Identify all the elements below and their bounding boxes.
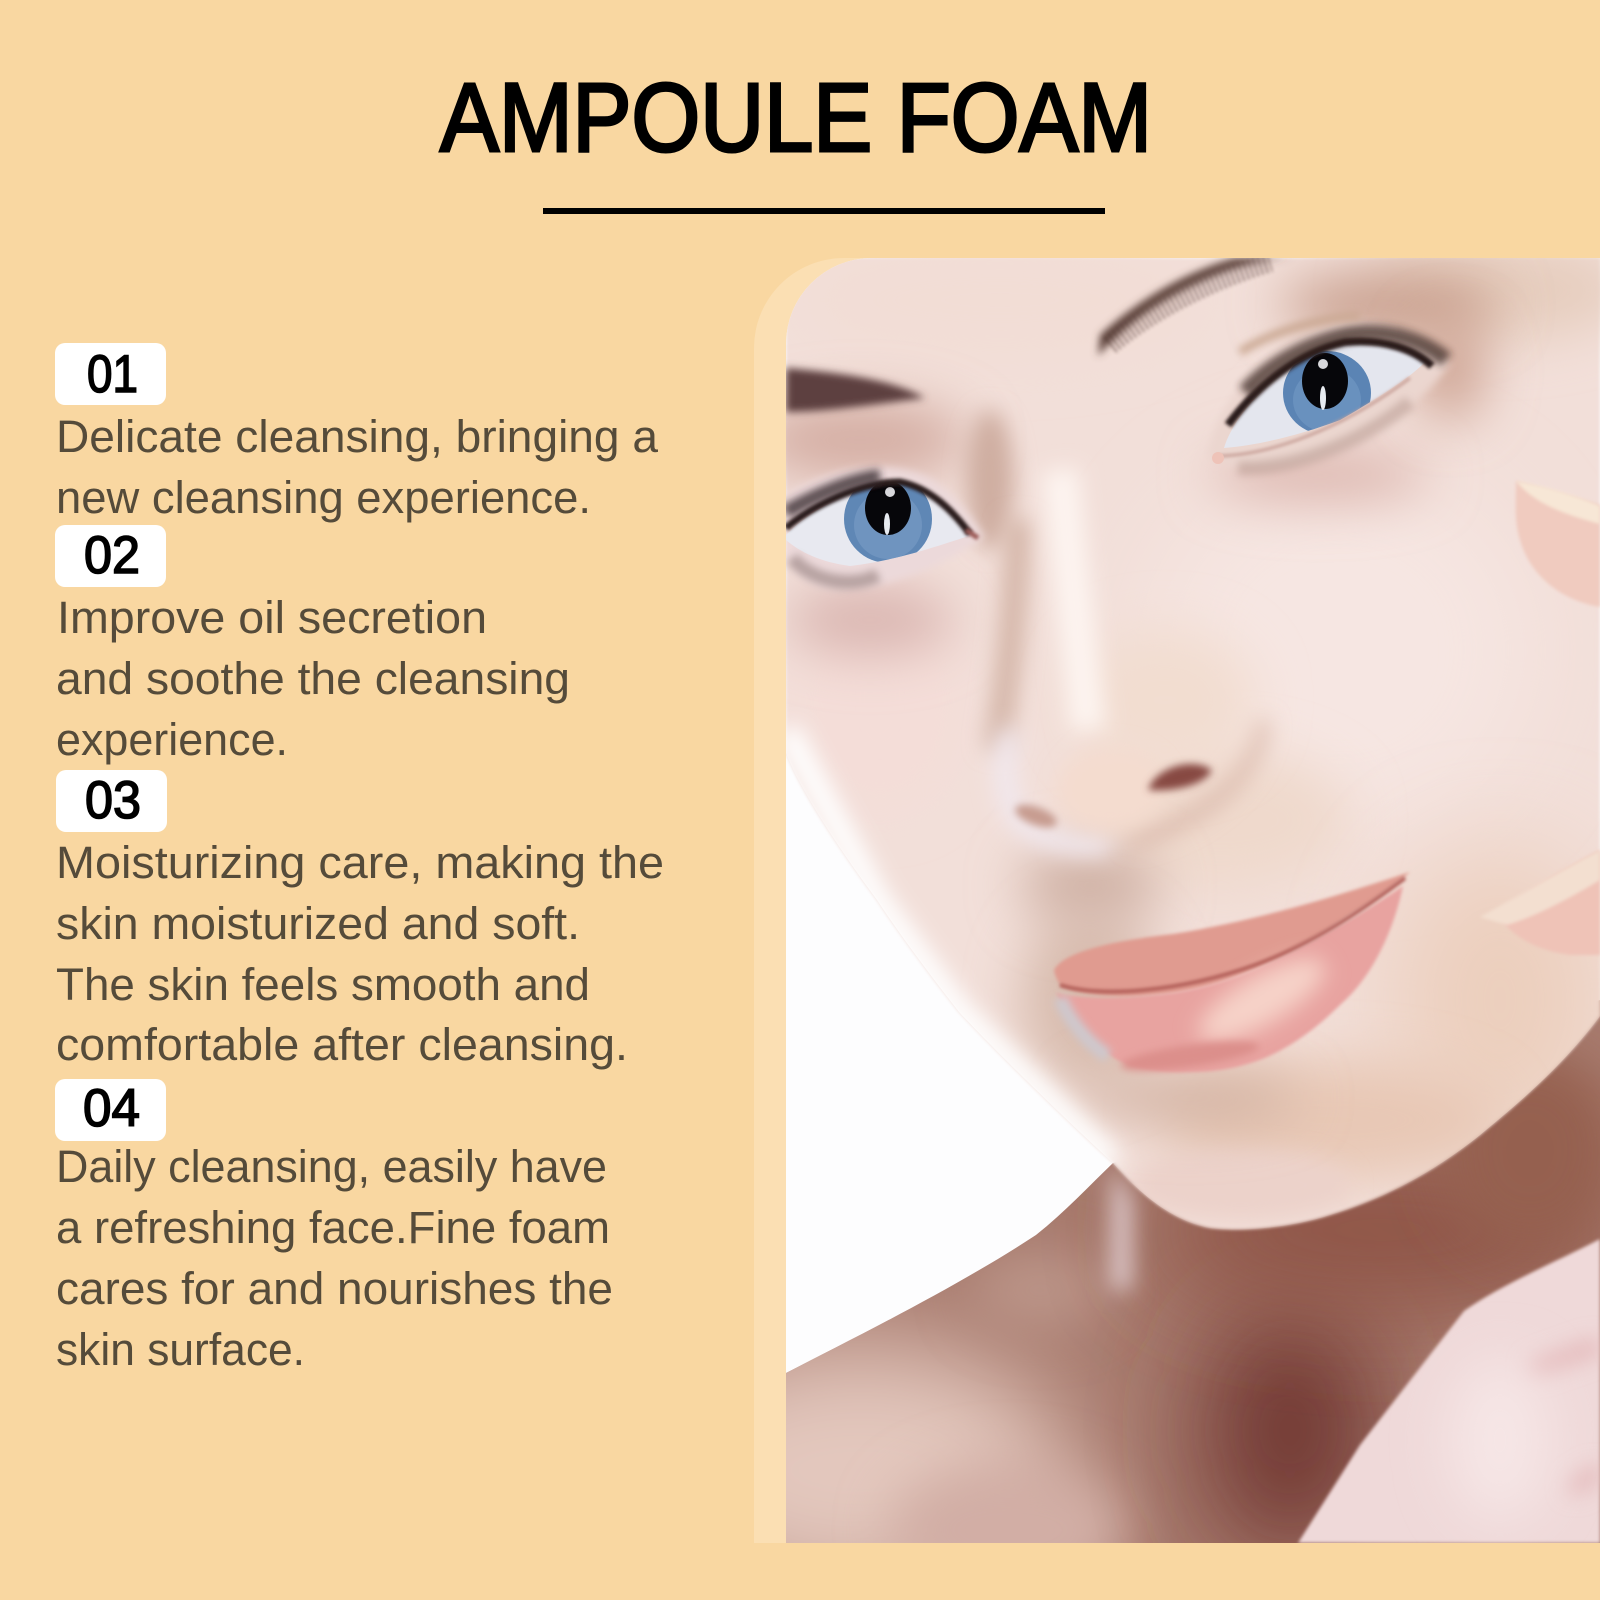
text block 03: The skin feels smooth and xyxy=(56,959,590,1010)
left eye xyxy=(786,467,984,590)
face skin xyxy=(750,240,1600,1229)
eye socket shading xyxy=(750,400,970,480)
badge 04: 04 xyxy=(83,1079,140,1138)
left eyebrow xyxy=(786,368,925,412)
text block 03 xyxy=(56,837,664,1070)
text block 04: Daily cleansing, easily have xyxy=(56,1141,607,1192)
badge 03 xyxy=(56,770,167,832)
text block 03: Moisturizing care, making the xyxy=(56,837,664,888)
upper finger xyxy=(1516,481,1600,607)
nose shading xyxy=(996,520,1018,750)
badge 03: 03 xyxy=(85,771,141,830)
lips xyxy=(1054,872,1410,1077)
right eyebrow xyxy=(1098,258,1295,356)
text block 02 xyxy=(56,592,570,765)
text block 04: skin surface. xyxy=(56,1324,305,1375)
text block 02: experience. xyxy=(56,714,288,765)
panel backing: light cream band behind photo xyxy=(754,258,900,1543)
text block 02: and soothe the cleansing xyxy=(56,653,570,704)
badge 02: 02 xyxy=(84,526,140,585)
hand at lower right xyxy=(1298,1239,1600,1543)
badge 04 xyxy=(55,1079,166,1141)
nostrils xyxy=(1012,764,1212,832)
neck and shoulder xyxy=(786,1000,1600,1543)
badge 01 xyxy=(55,343,166,405)
text block 03: skin moisturized and soft. xyxy=(56,898,580,949)
illustration: face photo xyxy=(786,258,1600,1543)
right eye xyxy=(1208,316,1450,468)
badge 02 xyxy=(55,525,166,587)
panel: feature list xyxy=(55,343,664,1375)
badge 01: 01 xyxy=(87,345,138,404)
text block 01 xyxy=(56,411,659,523)
title underline xyxy=(543,208,1105,214)
text block 04: cares for and nourishes the xyxy=(56,1263,613,1314)
text block 04 xyxy=(56,1141,613,1375)
text block 04: a refreshing face.Fine foam xyxy=(56,1202,610,1253)
text block 01: Delicate cleansing, bringing a xyxy=(56,411,659,462)
title: AMPOULE FOAM xyxy=(440,63,1152,172)
text block 03: comfortable after cleansing. xyxy=(56,1019,628,1070)
text block 02: Improve oil secretion xyxy=(57,592,487,643)
lower finger xyxy=(1480,850,1600,955)
text block 01: new cleansing experience. xyxy=(56,472,591,523)
